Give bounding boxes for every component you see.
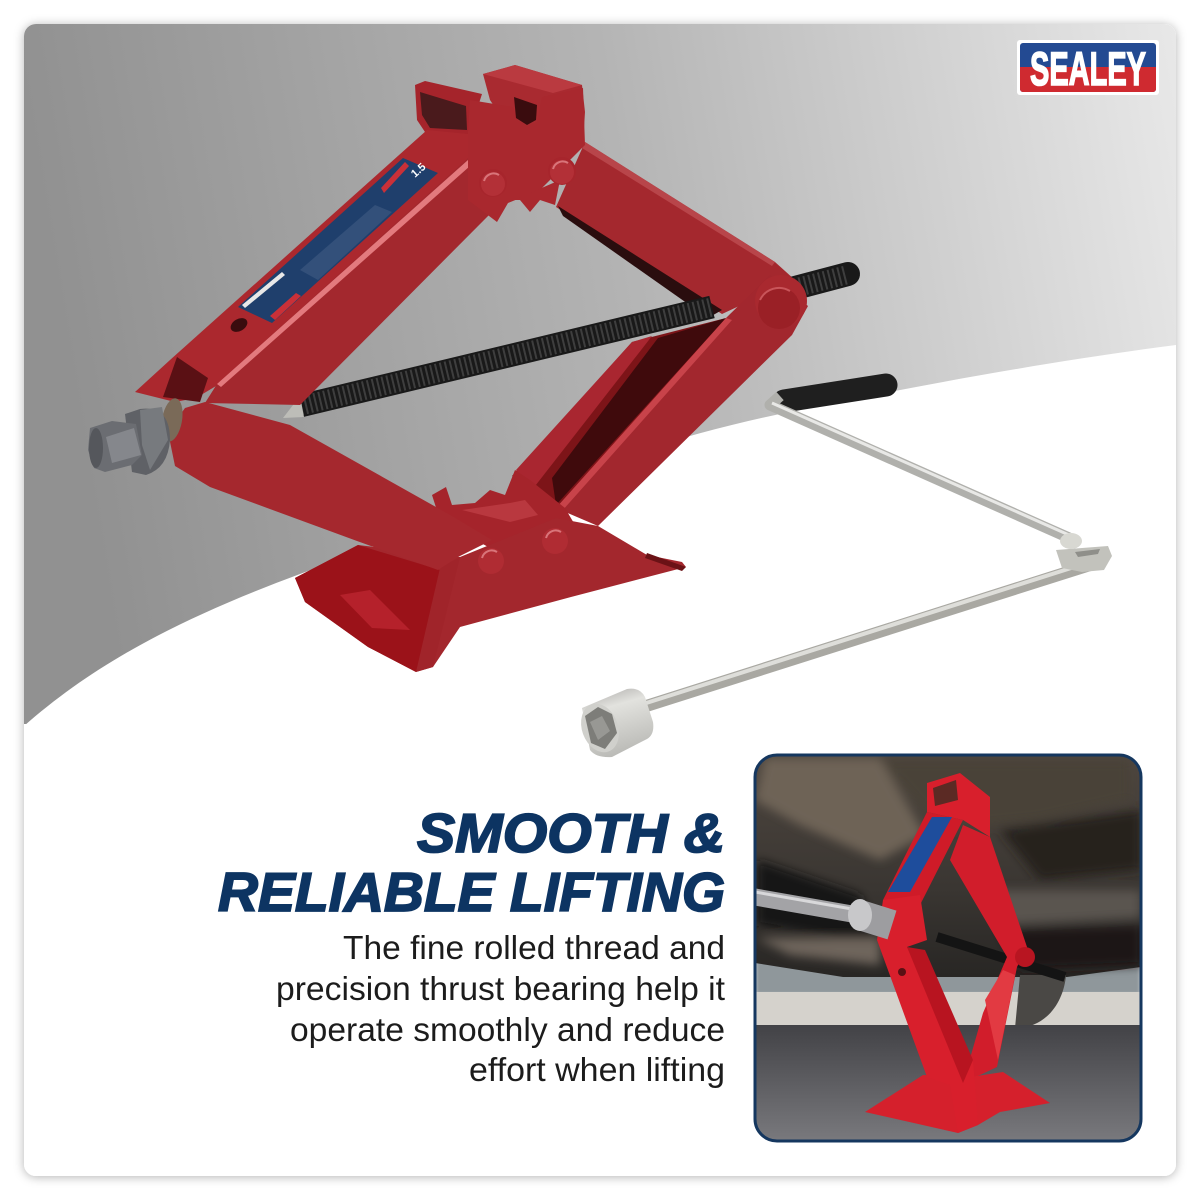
jack: rating label: 1.5 [409, 161, 428, 180]
inset: rear jack arm [950, 825, 1027, 1083]
handle: rubber grip [784, 385, 886, 401]
inset: top bracket [927, 773, 990, 837]
body text: operate smoothly and reduce [290, 1011, 725, 1048]
handle: socket [575, 689, 653, 758]
jack: lead screw [283, 274, 848, 418]
jack: lower left arm [168, 402, 492, 570]
jack: upper right arm [556, 142, 795, 314]
inset: frame [755, 755, 1141, 1141]
inset: road [755, 1025, 1141, 1143]
body text: effort when lifting [469, 1051, 725, 1088]
heading [218, 802, 725, 923]
jack: rating label [238, 158, 438, 323]
inset: front upper arm [883, 812, 963, 905]
inset: front lower arm [877, 895, 978, 1133]
handle: hinge [1056, 533, 1112, 572]
product photo: scissor jack [88, 65, 848, 672]
inset: screw [937, 937, 1065, 977]
jack: lower right arm [556, 275, 808, 526]
jack: foot rivets [478, 528, 568, 574]
wheel brace handle [575, 385, 1112, 758]
body text: The fine rolled thread and [343, 929, 725, 966]
jack: hex nut and thrust bearing [88, 397, 186, 475]
grey gradient backdrop with curved white sweep [24, 24, 1176, 724]
handle: crank bend [770, 396, 1076, 541]
jack: right pivot plate and bolt [755, 275, 807, 329]
body text [276, 929, 725, 1088]
inset: wheel brace [755, 897, 852, 914]
inset: car underside [755, 755, 1141, 977]
inset: tyre [1015, 975, 1066, 1028]
heading: RELIABLE LIFTING [218, 861, 725, 923]
jack: lower right channel [512, 318, 726, 512]
inset: pivot [1015, 947, 1035, 967]
body text: precision thrust bearing help it [276, 970, 725, 1007]
logo: Sealey [1017, 40, 1159, 95]
jack: top saddle rear [415, 65, 585, 160]
jack: base teeth [432, 470, 575, 548]
inset: blurred background behind the car [756, 963, 1140, 992]
inset photo: jack in use under a car [755, 755, 1141, 1143]
inset: base [865, 1072, 1050, 1133]
jack: front top plate with rivets [468, 88, 585, 222]
jack: upper left arm [135, 130, 492, 405]
heading: SMOOTH & [417, 802, 725, 864]
jack: foot plate [295, 518, 686, 672]
handle: long rod [640, 565, 1090, 708]
inset: jack label [888, 817, 952, 892]
